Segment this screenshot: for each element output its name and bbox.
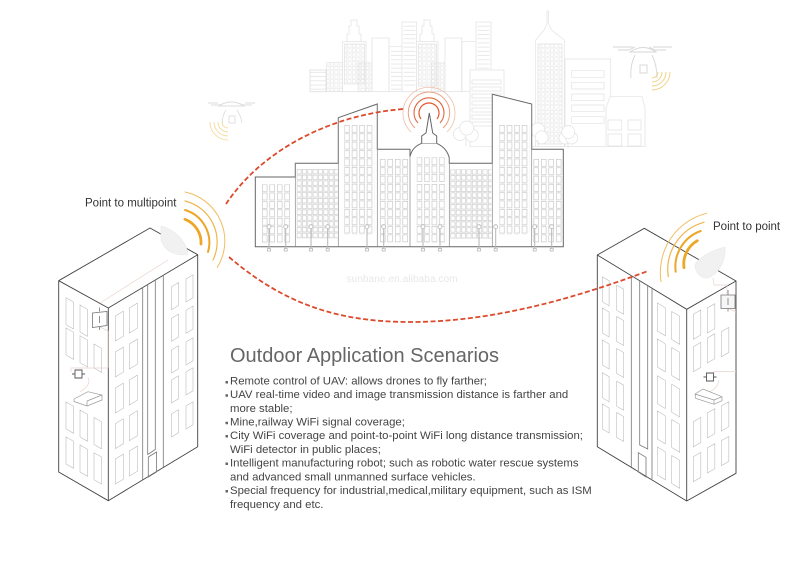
dashed link to central tower xyxy=(226,109,403,204)
dish antenna xyxy=(161,226,188,255)
building body xyxy=(59,228,198,501)
list text: Intelligent manufacturing robot; such as robotic water rescue systems xyxy=(230,458,579,470)
switch xyxy=(695,389,722,404)
list bullets xyxy=(226,381,228,492)
list text: Mine,railway WiFi signal coverage; xyxy=(230,416,405,428)
tower signal rings xyxy=(403,87,455,132)
drone: left with signal xyxy=(208,102,255,140)
city windows xyxy=(262,125,564,243)
switch xyxy=(74,392,102,406)
building body xyxy=(597,228,736,501)
dashed link to right building xyxy=(229,257,648,322)
drone: right with signal xyxy=(613,47,672,90)
list text: and advanced small unmanned surface vehicles. xyxy=(230,471,476,483)
wires xyxy=(71,260,168,392)
list text: WiFi detector in public places; xyxy=(230,444,381,456)
label: point to multipoint: Point to multipoint xyxy=(85,198,177,210)
central city buildings xyxy=(255,94,564,251)
scenario list xyxy=(226,375,592,511)
PoE injector xyxy=(704,373,716,381)
list text: more stable; xyxy=(230,403,293,415)
central shaft xyxy=(143,275,163,480)
wires xyxy=(708,278,736,393)
dish antenna xyxy=(695,247,725,278)
list text: City WiFi coverage and point-to-point WiFi long distance transmission; xyxy=(230,430,583,442)
left signal waves xyxy=(185,192,225,267)
list text: UAV real-time video and image transmission distance is farther and xyxy=(230,389,568,401)
PoE injector xyxy=(72,370,85,378)
street lamps xyxy=(267,225,554,251)
label: point to point: Point to point xyxy=(713,221,781,233)
list text: Special frequency for industrial,medical,military equipment, such as ISM xyxy=(230,485,592,497)
right building xyxy=(597,228,736,501)
heading: Outdoor Application Scenarios xyxy=(230,345,499,367)
windows xyxy=(602,277,729,488)
trees xyxy=(454,121,578,148)
list text: Remote control of UAV: allows drones to fly farther; xyxy=(230,375,487,387)
building dividers xyxy=(295,94,532,247)
outdoor unit xyxy=(721,290,735,312)
watermark: sunbane.en.alibaba.com xyxy=(346,274,458,285)
central shaft xyxy=(631,276,652,479)
background city skyline xyxy=(310,11,645,148)
list text: frequency and etc. xyxy=(230,499,323,511)
city outline xyxy=(255,94,563,247)
outdoor unit xyxy=(92,308,107,330)
list text xyxy=(230,375,592,511)
windows xyxy=(66,275,193,484)
left building xyxy=(59,226,198,501)
right signal waves xyxy=(660,213,707,282)
